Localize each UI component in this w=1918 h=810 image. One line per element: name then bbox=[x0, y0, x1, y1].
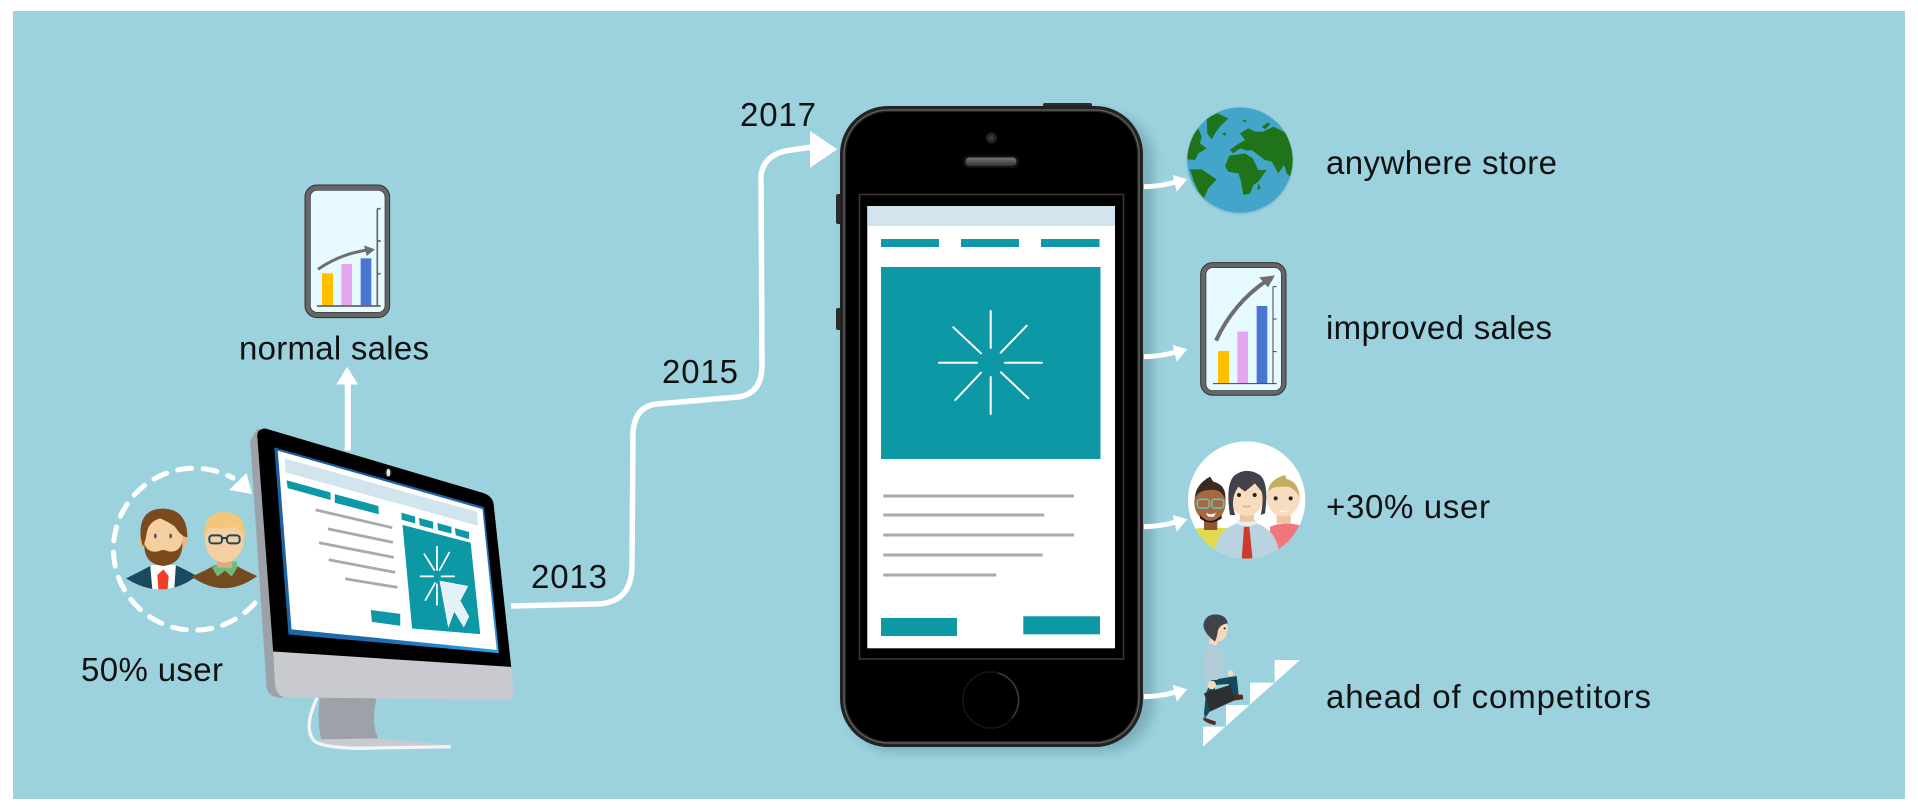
icon: improved sales tablet chart bbox=[1201, 263, 1286, 395]
label: 50% user: 50% user bbox=[81, 651, 223, 688]
monitor stand bbox=[309, 695, 451, 748]
stairs bbox=[1203, 660, 1300, 747]
label: ahead of competitors: ahead of competitors bbox=[1326, 678, 1651, 715]
man bbox=[1202, 614, 1243, 725]
arrow: monitor up to normal sales bbox=[336, 367, 358, 451]
phone body bbox=[840, 106, 1143, 747]
label: 2015: 2015 bbox=[662, 353, 738, 390]
phone text lines bbox=[883, 496, 1074, 575]
label: 2017: 2017 bbox=[740, 96, 816, 133]
cursor bbox=[440, 581, 469, 627]
arrow: to globe bbox=[1144, 175, 1187, 192]
label: improved sales: improved sales bbox=[1326, 309, 1552, 346]
label: anywhere store: anywhere store bbox=[1326, 144, 1557, 181]
timeline arrow: 2013 to 2017 bbox=[511, 131, 837, 606]
label: +30% user: +30% user bbox=[1326, 488, 1490, 525]
icon: group of three users bbox=[1188, 441, 1305, 563]
phone camera and speaker bbox=[963, 132, 1019, 168]
icon: globe bbox=[1186, 107, 1295, 214]
phone buttons bbox=[881, 616, 1100, 636]
arrow: to improved sales bbox=[1144, 345, 1187, 362]
icon: normal sales tablet chart bbox=[305, 185, 390, 318]
users with dashed cycle arrow bbox=[113, 468, 257, 630]
icon: two users bbox=[126, 509, 257, 593]
label: 2013: 2013 bbox=[531, 558, 607, 595]
icon: smartphone bbox=[836, 103, 1154, 752]
monitor screen bbox=[274, 447, 499, 653]
phone nav tabs bbox=[881, 239, 1100, 247]
icon: man climbing stairs bbox=[1202, 614, 1300, 747]
label: normal sales: normal sales bbox=[239, 330, 429, 366]
phone home button bbox=[963, 672, 1019, 728]
arrow: to more users bbox=[1144, 515, 1187, 532]
phone screen bbox=[860, 194, 1124, 659]
phone side buttons bbox=[836, 103, 1092, 330]
dashed circle arrow bbox=[113, 468, 255, 630]
arrow: to stairs bbox=[1144, 685, 1187, 702]
monitor body bbox=[250, 429, 297, 698]
icon: desktop monitor bbox=[250, 429, 514, 700]
phone hero block bbox=[881, 267, 1100, 459]
